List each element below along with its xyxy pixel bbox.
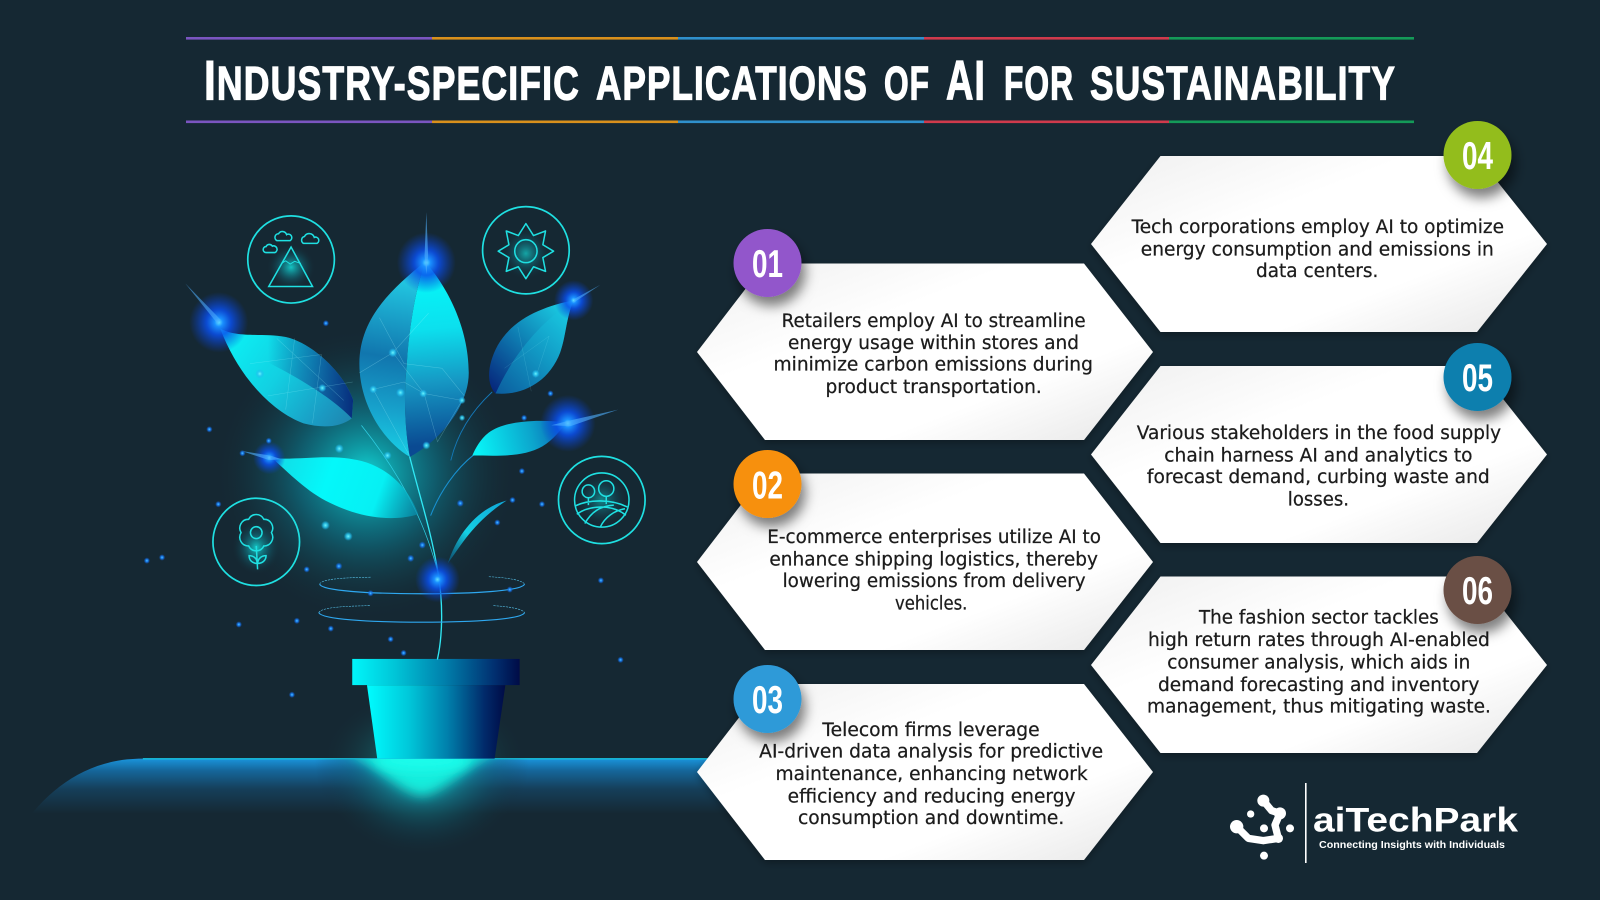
- hexagon 01: [697, 264, 1153, 440]
- leaf: left upper: [220, 328, 353, 426]
- plant illustration: [18, 207, 781, 860]
- ground surface: [37, 758, 724, 838]
- text 01: product transportation.: [826, 377, 1042, 398]
- text 03: AI-driven data analysis for predictive: [759, 741, 1103, 762]
- text 02: [767, 527, 1101, 614]
- text 06: management, thus mitigating waste.: [1147, 696, 1491, 718]
- icon: flower: [213, 498, 300, 585]
- panel 01: [697, 229, 1153, 440]
- text 05: chain harness AI and analytics to: [1164, 446, 1473, 466]
- number badge 06: [1444, 556, 1512, 624]
- icon: farm field: [558, 456, 645, 544]
- hexagon 02: [697, 474, 1153, 650]
- panel 02: [697, 450, 1153, 650]
- number badge 02: 02: [752, 464, 783, 508]
- panel 06: [1091, 556, 1547, 753]
- panel 05: [1091, 343, 1547, 543]
- number badge 04: [1444, 121, 1512, 189]
- hexagon 04: [1091, 156, 1547, 332]
- text 04: data centers.: [1256, 261, 1378, 282]
- text 03: consumption and downtime.: [798, 808, 1064, 829]
- hexagon 06: [1091, 576, 1547, 753]
- bottom multicolour rule: [186, 120, 1414, 123]
- text 05: forecast demand, curbing waste and: [1147, 467, 1490, 488]
- text 04: Tech corporations employ AI to optimize: [1131, 217, 1504, 238]
- logo divider: [1305, 783, 1307, 863]
- logo mark: [1230, 795, 1294, 860]
- text 04: energy consumption and emissions in: [1141, 239, 1494, 260]
- panel 04: [1091, 121, 1547, 332]
- logo tagline: Connecting Insights with Individuals: [1319, 839, 1505, 851]
- pot glow: [321, 690, 527, 759]
- text 06: high return rates through AI-enabled: [1148, 630, 1490, 651]
- number badge 04: 04: [1462, 135, 1493, 178]
- text 03: maintenance, enhancing network: [776, 764, 1088, 785]
- heading: SUSTAINABILITY: [1090, 56, 1396, 109]
- central glow: [214, 327, 518, 621]
- text 02: E-commerce enterprises utilize AI to: [767, 527, 1101, 548]
- heading: FOR: [1004, 56, 1074, 109]
- text 02: lowering emissions from delivery: [783, 571, 1086, 592]
- leaf: bottom small: [448, 501, 507, 563]
- text 01: energy usage within stores and: [788, 333, 1079, 354]
- leaf: left lower: [272, 457, 418, 518]
- leaf: top centre: [359, 262, 469, 457]
- text 04: [1131, 217, 1504, 282]
- title block: [186, 37, 1414, 123]
- floating particles: [144, 320, 624, 698]
- icon: sun: [483, 207, 569, 294]
- text 06: [1147, 608, 1491, 718]
- number badge 05: 05: [1462, 357, 1493, 400]
- number badge 06: 06: [1462, 570, 1493, 613]
- icon: mountain and clouds: [248, 216, 334, 303]
- number badge 01: [734, 229, 802, 297]
- heading: OF: [884, 56, 930, 109]
- logo wordmark: aiTechPark: [1313, 802, 1518, 840]
- hologram rings: [319, 577, 525, 622]
- text 06: demand forecasting and inventory: [1158, 675, 1479, 696]
- hexagon 05: [1091, 366, 1547, 543]
- text 06: The fashion sector tackles: [1198, 608, 1439, 629]
- number badge 03: 03: [752, 679, 783, 722]
- number badge 03: [734, 665, 802, 733]
- logo: [1230, 783, 1518, 863]
- number badge 05: [1444, 343, 1512, 411]
- text 05: Various stakeholders in the food supply: [1137, 423, 1501, 444]
- text 03: [759, 720, 1103, 829]
- text 06: consumer analysis, which aids in: [1167, 653, 1470, 674]
- text 02: enhance shipping logistics, thereby: [769, 550, 1098, 571]
- number badge 01: 01: [752, 243, 783, 286]
- text 05: [1137, 423, 1501, 510]
- heading: APPLICATIONS: [596, 56, 868, 109]
- hexagon 03: [697, 684, 1153, 860]
- heading: INDUSTRY-SPECIFIC: [204, 48, 580, 111]
- text 02: vehicles.: [895, 593, 967, 614]
- leaf: right upper: [489, 300, 574, 394]
- glowing leaf tips: [185, 212, 618, 602]
- heading: [204, 48, 1396, 111]
- text 01: Retailers employ AI to streamline: [782, 311, 1086, 332]
- flower pot: [352, 659, 520, 759]
- stems: [362, 392, 492, 659]
- text 01: minimize carbon emissions during: [774, 355, 1093, 376]
- top multicolour rule: [186, 37, 1414, 40]
- heading: AI: [946, 48, 986, 111]
- text 03: efficiency and reducing energy: [788, 786, 1076, 807]
- leaf: right middle: [472, 421, 567, 456]
- panel 03: [697, 665, 1153, 860]
- text 01: [774, 311, 1093, 398]
- text 05: losses.: [1288, 489, 1349, 510]
- number badge 02: [734, 450, 802, 518]
- text 03: Telecom firms leverage: [821, 720, 1040, 741]
